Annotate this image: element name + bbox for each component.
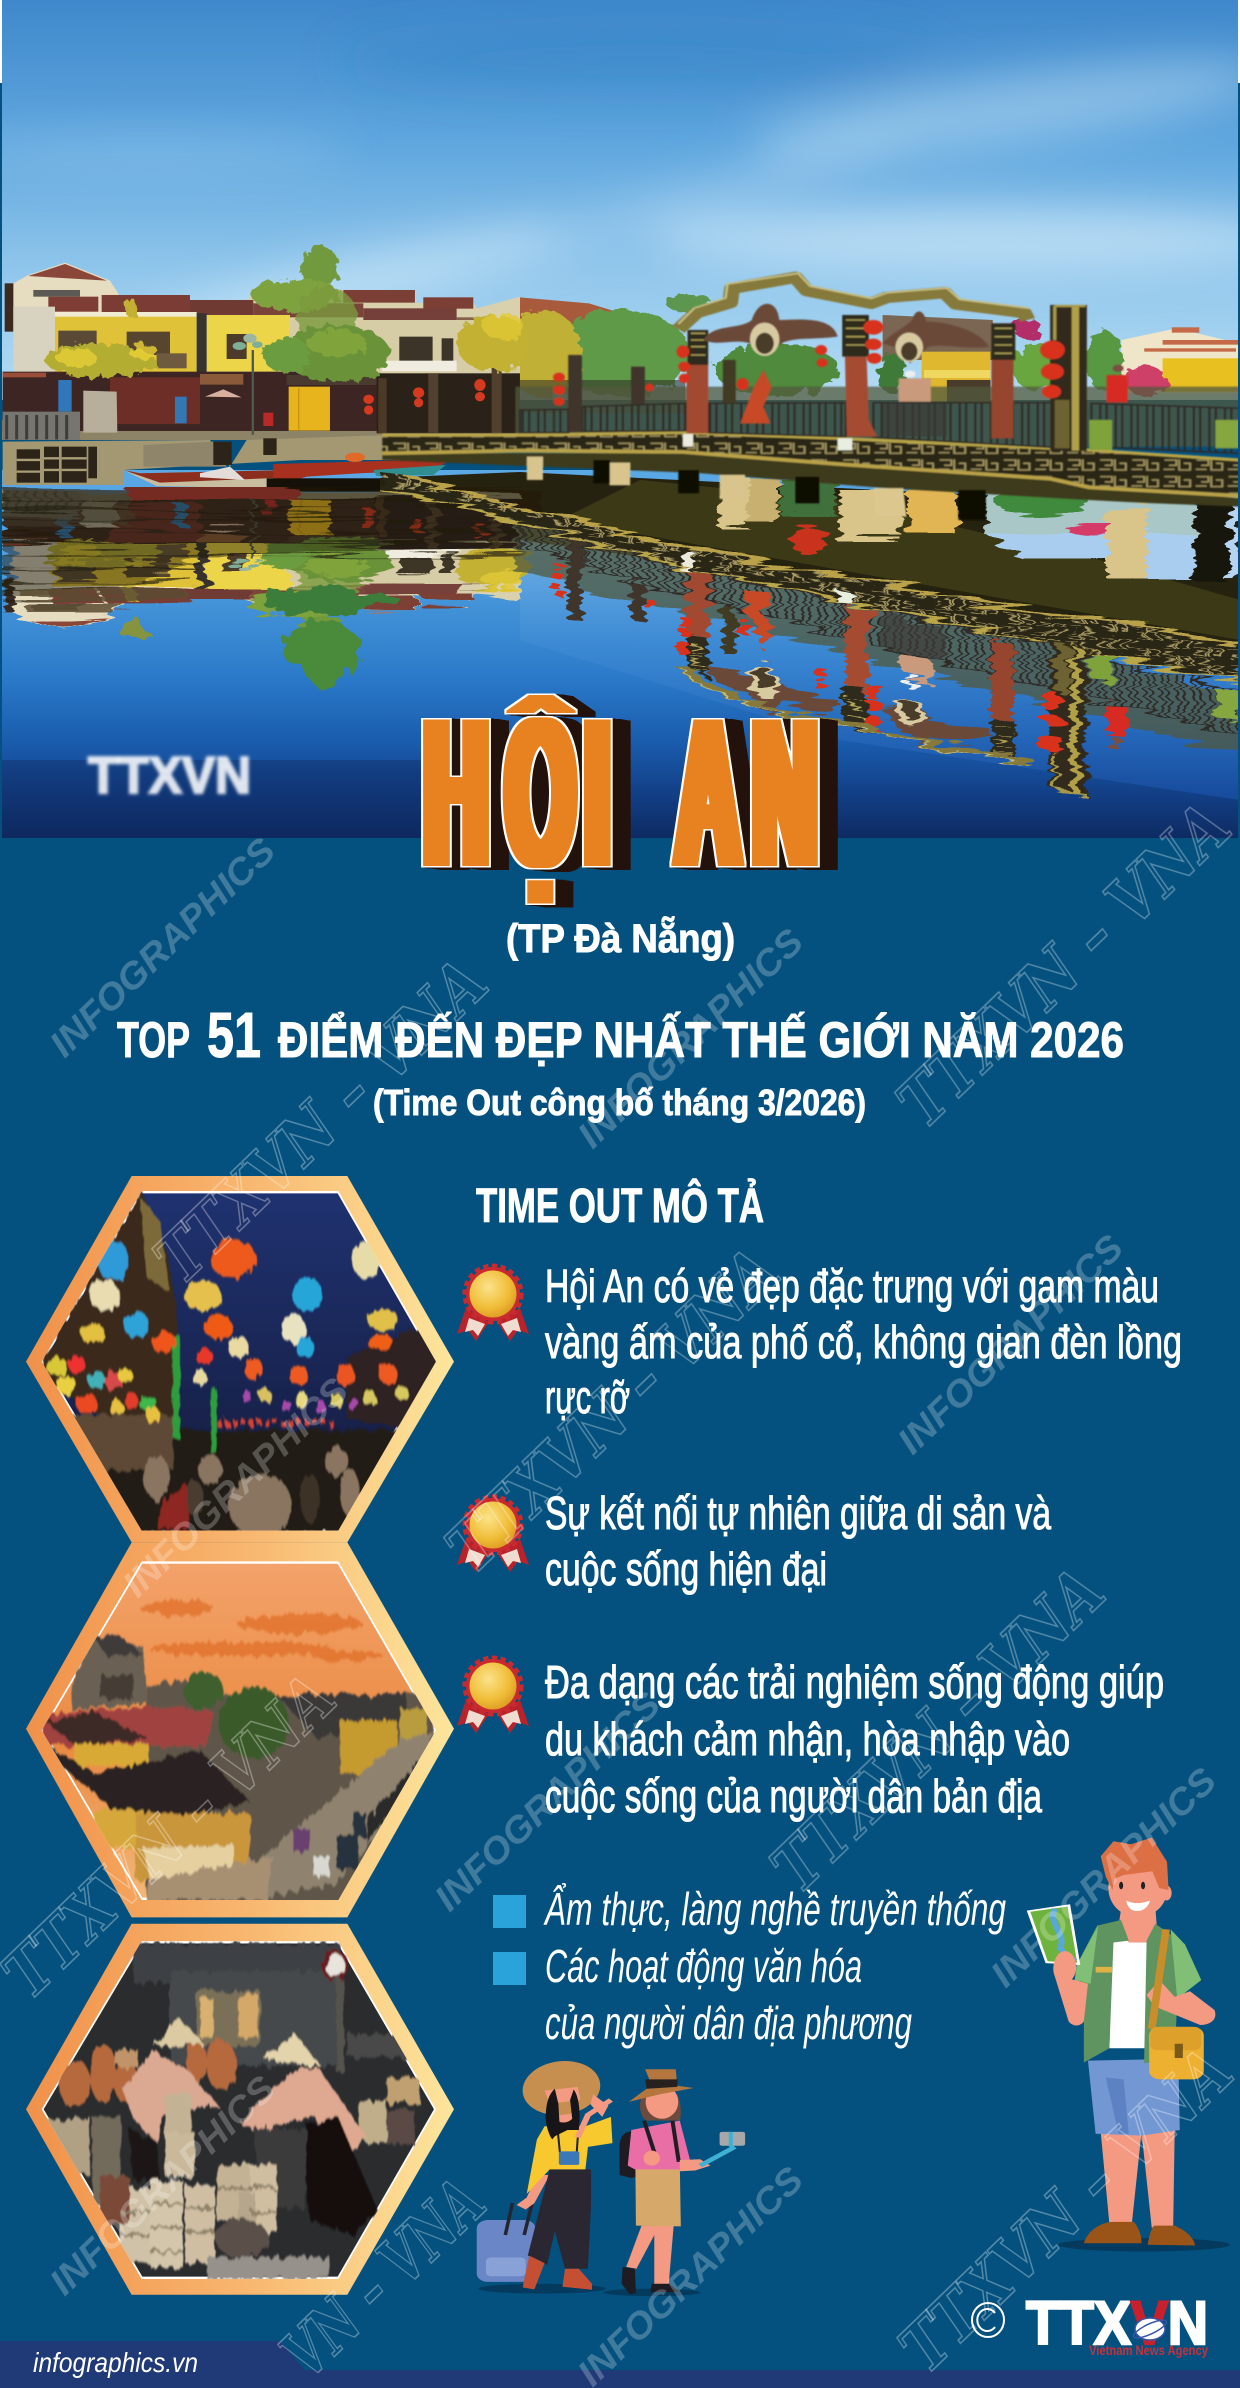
icon: medal 2 bbox=[457, 1498, 529, 1572]
dark reflection under the bridge bbox=[380, 472, 1240, 655]
footer site name: infographics.vn bbox=[33, 2347, 198, 2378]
woman with suitcase bbox=[477, 2051, 614, 2294]
hexagon 2: sunset over the old town bbox=[26, 1542, 454, 1917]
watermarks: INFOGRAPHICS bbox=[115, 1370, 356, 1605]
watermarks: TTXVN – VNA bbox=[431, 1232, 794, 1587]
copyright symbol bbox=[972, 2303, 1004, 2337]
far trees and buildings behind the bridge bbox=[504, 293, 1240, 413]
headline bbox=[117, 999, 1124, 1071]
source line: (Time Out công bố tháng 3/2026) bbox=[373, 1082, 866, 1123]
headline: 51 bbox=[207, 999, 261, 1071]
logo: TTXVN: Vietnam News Agency bbox=[1089, 2343, 1208, 2358]
photo credit TTXVN: TTXVN bbox=[88, 747, 251, 805]
hero photo: Hoi An bridge and river bbox=[0, 0, 1240, 839]
point 3 bbox=[545, 1656, 1164, 1822]
illustration: two female tourists bbox=[477, 2051, 745, 2296]
watermarks: INFOGRAPHICS bbox=[570, 921, 811, 1156]
watermarks: TTXVN – VNA bbox=[756, 1552, 1119, 1907]
point 3: du khách cảm nhận, hòa nhập vào bbox=[545, 1713, 1070, 1765]
stone bank, ladders and boats bbox=[3, 435, 453, 492]
reflection of the town bbox=[2, 487, 534, 630]
bullet list bbox=[493, 1883, 1006, 2049]
bullet list: của người dân địa phương bbox=[545, 1997, 912, 2049]
hexagon 1: lantern street at night bbox=[26, 1176, 454, 1542]
icon: medal 1 bbox=[457, 1267, 529, 1341]
watermarks: VN – VNA bbox=[266, 2163, 500, 2388]
bottom darkening of the water bbox=[2, 760, 421, 820]
hexagon 3: pottery workshop bbox=[26, 1924, 454, 2295]
point 1 bbox=[545, 1260, 1182, 1423]
reflection of the bridge bbox=[380, 472, 1238, 799]
top white corner strips bbox=[0, 0, 1240, 83]
watermarks: INFOGRAPHICS bbox=[983, 1760, 1224, 1995]
watermarks: INFOGRAPHICS bbox=[570, 2159, 811, 2388]
illustration: male tourist with map bbox=[1027, 1838, 1230, 2252]
watermarks bbox=[0, 787, 1240, 2388]
footer band bbox=[0, 2341, 1240, 2388]
watermarks: INFOGRAPHICS bbox=[42, 830, 283, 1065]
woman with selfie stick bbox=[603, 2069, 745, 2296]
river town bbox=[0, 245, 530, 440]
photo hexagons bbox=[26, 1176, 454, 2295]
title: Hoi An: HỘI AN bbox=[424, 676, 817, 911]
watermarks: INFOGRAPHICS bbox=[890, 1227, 1131, 1462]
icon: medal 3 bbox=[457, 1659, 529, 1733]
openings under the bridge bbox=[720, 475, 1239, 580]
logo: TTXVN: TTXVN bbox=[1026, 2289, 1208, 2357]
point 2: Sự kết nối tự nhiên giữa di sản và bbox=[545, 1487, 1051, 1539]
reflection of the tree bbox=[123, 586, 400, 688]
watermarks: INFOGRAPHICS bbox=[42, 2068, 283, 2303]
headline: TOP bbox=[117, 1012, 190, 1068]
bullet list: Các hoạt động văn hóa bbox=[545, 1940, 862, 1992]
watermarks: INFOGRAPHICS bbox=[427, 1684, 668, 1919]
point 2: cuộc sống hiện đại bbox=[545, 1543, 827, 1595]
section heading: TIME OUT MÔ TẢ bbox=[476, 1178, 764, 1233]
watermarks: TTXVN – VNA bbox=[139, 943, 502, 1298]
point 1: rực rỡ bbox=[545, 1371, 630, 1423]
bridge bbox=[382, 273, 1240, 520]
bullet list: Ẩm thực, làng nghề truyền thống bbox=[543, 1883, 1006, 1935]
point 2 bbox=[545, 1487, 1051, 1595]
subtitle: city: (TP Đà Nẵng) bbox=[506, 915, 735, 961]
point 3: cuộc sống của người dân bản địa bbox=[545, 1770, 1042, 1822]
